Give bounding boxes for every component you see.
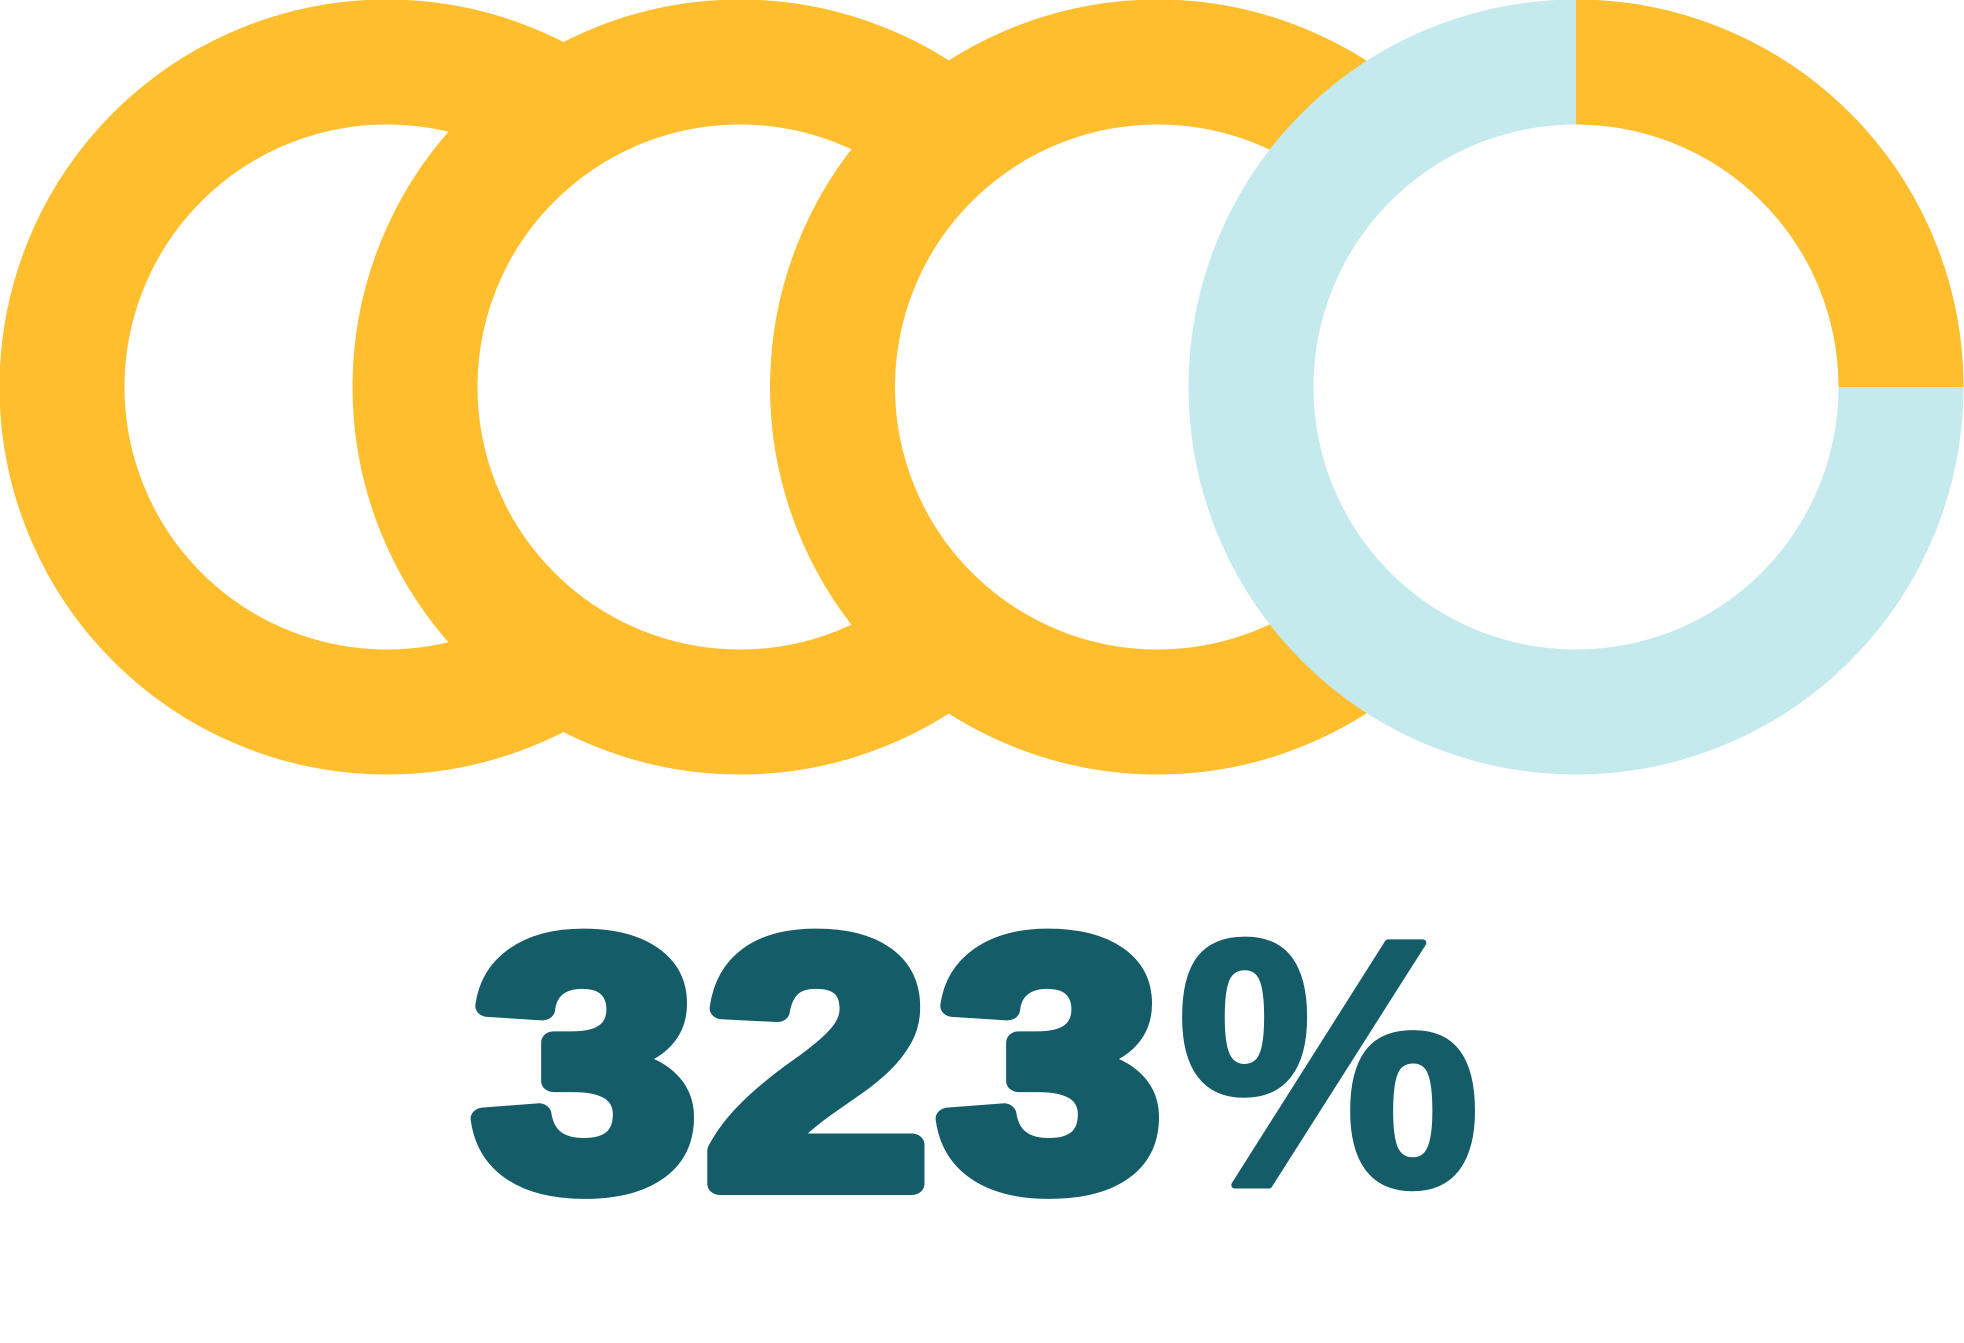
ring 1: full yellow <box>62 62 712 712</box>
ring 3: full yellow <box>832 62 1482 712</box>
ring 4: partially filled, light blue track with yellow quarter <box>1251 62 1901 712</box>
big number: 323%: 3 <box>939 867 1161 1259</box>
big number: 323%: 3 <box>474 867 696 1259</box>
big number: 323%: 2 <box>706 867 928 1259</box>
ring chart: four rings with the last one quarter filled <box>62 62 1901 712</box>
big number: 323%: % <box>1177 867 1481 1260</box>
ring 2: full yellow <box>415 62 1065 712</box>
big number: 323% <box>474 867 1481 1260</box>
